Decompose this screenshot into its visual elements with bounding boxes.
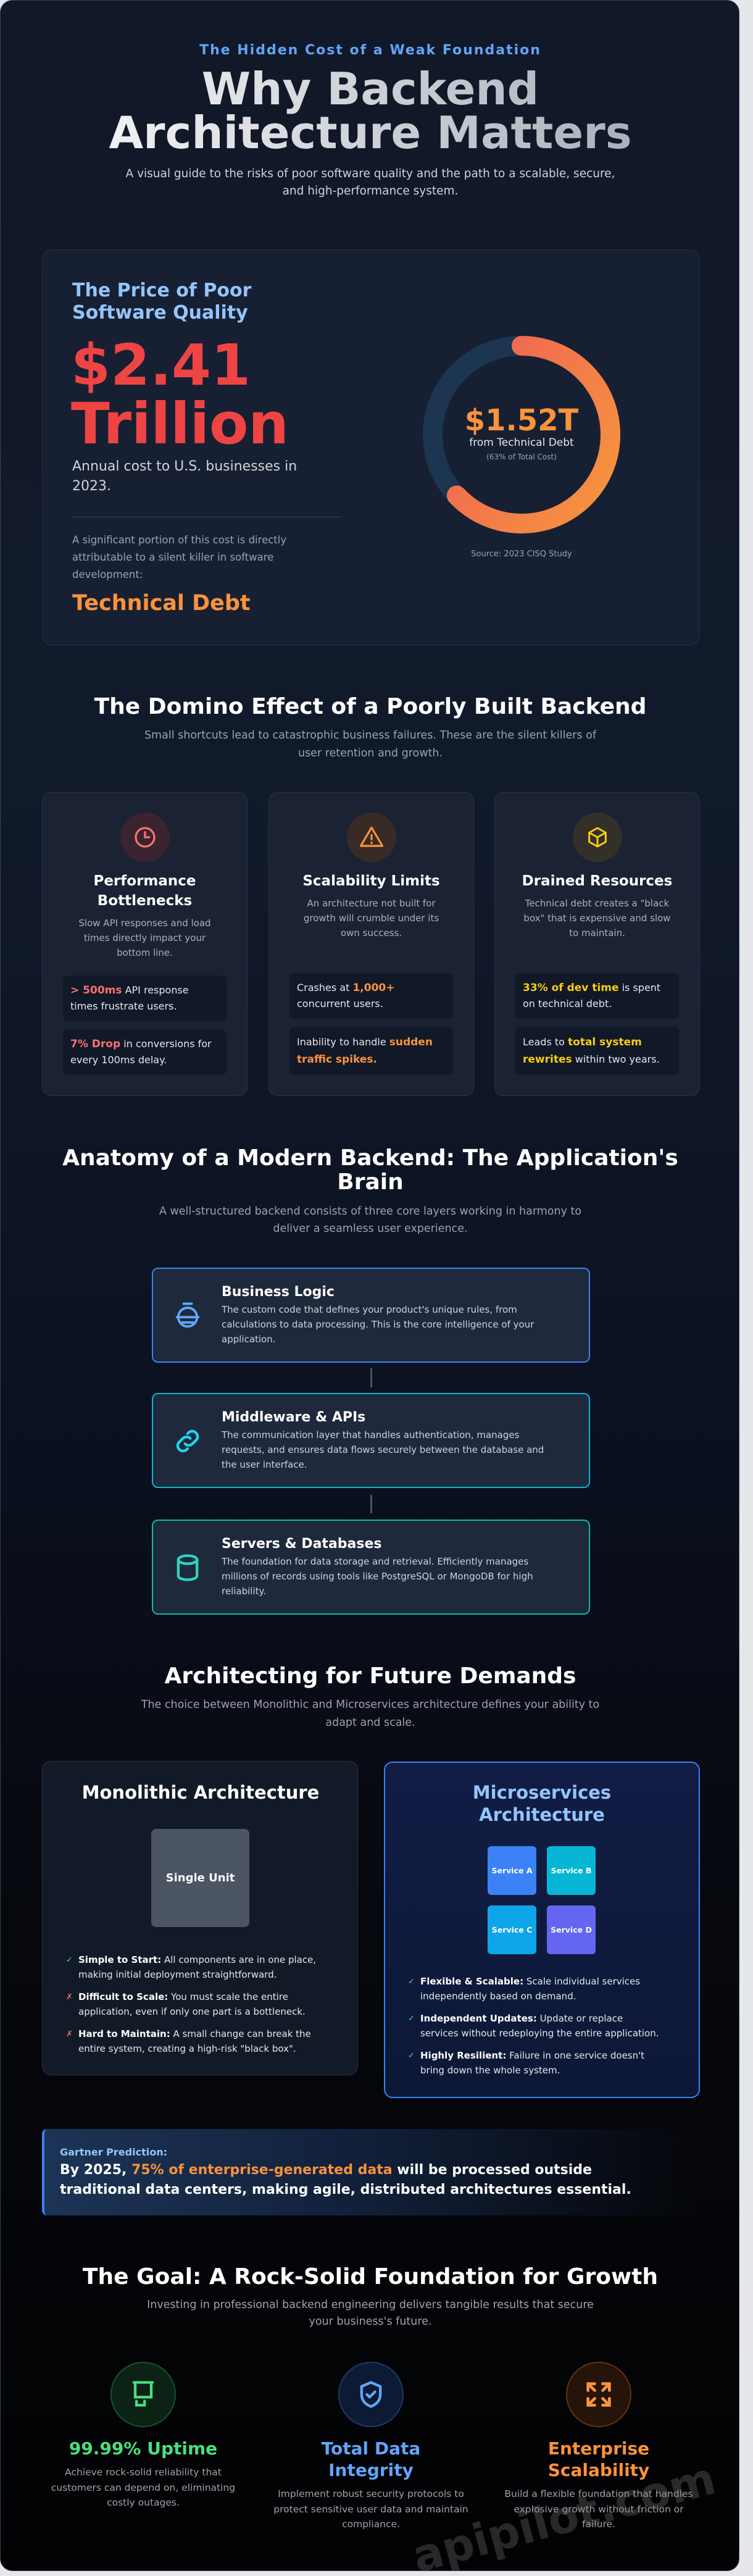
title: Why Backend (202, 63, 539, 115)
result: integrity: Total Data (322, 2438, 420, 2459)
layer: servers: The foundation for data storage and retrieval. Efficiently manages millions of records using tools like PostgreSQL or MongoDB for high reliability. (222, 1556, 533, 1597)
result: scalability (504, 2438, 693, 2530)
stats (289, 973, 453, 1075)
stats: 33% of dev time is spent on technical debt. (523, 982, 660, 1010)
card: performance: Performance Bottlenecks (93, 873, 196, 909)
donut label (465, 403, 578, 461)
heading: Monolithic Architecture (82, 1782, 319, 1803)
stats (515, 973, 679, 1075)
pros/cons list: Difficult to Scale: You must scale the entire application, even if only one part is a bottleneck. (78, 1991, 306, 2017)
stats: Crashes at 1,000+ concurrent users. (297, 982, 395, 1010)
result: scalability: Enterprise (548, 2438, 649, 2459)
stats: Leads to total system rewrites within two years. (523, 1036, 660, 1066)
source: Source: 2023 CISQ Study (471, 550, 572, 559)
layer: servers (152, 1520, 590, 1615)
donut label: from Technical Debt (469, 437, 574, 449)
anatomy subtitle: A well-structured backend consists of three core layers working in harmony to deliver a seamless user experience. (159, 1205, 581, 1235)
callout: gartner: traditional data centers, making agile, distributed architectures essential. (60, 2182, 631, 2198)
pros/cons list: ✗ (66, 2030, 73, 2039)
result: integrity: Integrity (328, 2460, 414, 2480)
icon: expand (566, 2362, 631, 2427)
layer: business logic (152, 1268, 590, 1363)
layer: middleware: Middleware & APIs (222, 1410, 365, 1425)
service blocks: Service A (491, 1866, 532, 1875)
service blocks: Service C (492, 1925, 532, 1934)
card: resources: Technical debt creates a "black box" that is expensive and slow to maintain. (523, 898, 671, 939)
icon: link (177, 1430, 199, 1452)
benefits list: bring down the whole system. (420, 2065, 560, 2076)
architecting heading: Architecting for Future Demands (165, 1663, 576, 1689)
card: performance (42, 792, 248, 1096)
architecting subtitle: The choice between Monolithic and Microservices architecture defines your ability to adapt and scale. (141, 1699, 599, 1729)
big number: Trillion (71, 391, 289, 457)
single unit block (151, 1829, 249, 1927)
card: resources (494, 792, 700, 1096)
result: scalability: Scalability (548, 2460, 649, 2480)
pros/cons list: Simple to Start: All components are in one place, making initial deployment straightforward. (78, 1954, 316, 1980)
eyebrow: The Hidden Cost of a Weak Foundation (199, 43, 541, 58)
card: resources: Drained Resources (522, 873, 672, 889)
stats (63, 976, 227, 1075)
benefits list: independently based on demand. (420, 1991, 576, 2002)
pros/cons list: ✗ (66, 1993, 73, 2002)
intro text: A visual guide to the risks of poor software quality and the path to a scalable, secure, (126, 167, 615, 180)
panel: monolithic (42, 1761, 358, 2075)
big number: $2.41 (71, 332, 251, 398)
layer: business logic: The custom code that defines your product's unique rules, from calculations to data processing. This is the core intelligence of your application. (222, 1304, 534, 1345)
benefits list: ✓ (408, 1977, 415, 1986)
benefits list: Highly Resilient: Failure in one service doesn't (420, 2050, 644, 2061)
pros/cons list: Hard to Maintain: A small change can break the entire system, creating a high-risk "black box". (78, 2028, 311, 2054)
pros/cons list: ✓ (66, 1955, 73, 1965)
service blocks: Service D (551, 1925, 592, 1934)
single unit block: Single Unit (166, 1871, 235, 1884)
anatomy heading: Anatomy of a Modern Backend: The Application's Brain (62, 1145, 678, 1195)
callout: gartner (42, 2129, 700, 2215)
benefits list: Independent Updates: Update or replace (420, 2013, 623, 2024)
result: integrity: Implement robust security protocols to protect sensitive user data and maintain compliance. (273, 2488, 468, 2530)
intro text: and high-performance system. (283, 185, 458, 198)
explanation: A significant portion of this cost is directly attributable to a silent killer in software development: (72, 534, 286, 580)
stats: Inability to handle sudden traffic spikes. (297, 1036, 433, 1066)
heading: The Price of Poor Software Quality (72, 280, 251, 324)
callout: gartner: Gartner Prediction: (60, 2146, 167, 2158)
domino heading: The Domino Effect of a Poorly Built Backend (94, 694, 646, 719)
icon: shield (338, 2362, 404, 2427)
service blocks (488, 1846, 596, 1954)
icon: brain (175, 1303, 200, 1328)
big number (71, 332, 289, 457)
icon: uptime (110, 2362, 176, 2427)
card: scalability: Scalability Limits (302, 873, 440, 889)
pros/cons list (66, 1954, 316, 2054)
icon: clock (120, 813, 170, 862)
panel: microservices (384, 1762, 700, 2098)
result: integrity (273, 2438, 468, 2530)
stats: 7% Drop in conversions for every 100ms delay. (70, 1038, 212, 1066)
intro text (126, 167, 615, 198)
icon: database (177, 1554, 199, 1581)
goal heading: The Goal: A Rock-Solid Foundation for Growth (83, 2264, 658, 2290)
heading: Microservices (473, 1782, 611, 1803)
donut label: (63% of Total Cost) (486, 453, 557, 461)
annual text: Annual cost to U.S. businesses in 2023. (72, 459, 297, 494)
goal subtitle: Investing in professional backend engineering delivers tangible results that secure your business's future. (147, 2299, 594, 2328)
domino subtitle: Small shortcuts lead to catastrophic business failures. These are the silent killers of user retention and growth. (144, 729, 596, 759)
benefits list: ✓ (408, 2051, 415, 2060)
result: uptime: 99.99% Uptime (69, 2438, 217, 2459)
layer: middleware (152, 1393, 590, 1488)
heading: Architecture (479, 1804, 605, 1825)
heading (473, 1782, 611, 1825)
card: scalability: An architecture not built for growth will crumble under its own success. (304, 898, 439, 939)
benefits list: Flexible & Scalable: Scale individual services (420, 1976, 640, 1987)
technical debt label: Technical Debt (72, 591, 251, 616)
benefits list (408, 1976, 659, 2076)
layer: middleware: The communication layer that handles authentication, manages requests, and ensures data flows securely between the database and the user interface. (222, 1429, 544, 1470)
service blocks: Service B (551, 1866, 591, 1875)
panel: price of poor quality (42, 249, 700, 645)
callout: gartner: By 2025, 75% of enterprise-generated data will be processed outside (60, 2162, 592, 2178)
card: scalability (268, 792, 474, 1096)
card: performance: Slow API responses and load times directly impact your bottom line. (78, 918, 211, 958)
icon: cube (573, 813, 622, 862)
benefits list: services without redeploying the entire application. (420, 2028, 659, 2039)
donut label: $1.52T (465, 403, 578, 438)
benefits list: ✓ (408, 2014, 415, 2023)
title (1, 67, 740, 155)
layer: business logic: Business Logic (222, 1284, 335, 1300)
result: scalability: Build a flexible foundation that handles explosive growth without friction or failure. (504, 2488, 693, 2530)
icon: warning (347, 813, 396, 862)
layer: servers: Servers & Databases (222, 1536, 381, 1552)
donut chart (423, 336, 620, 533)
title: Architecture Matters (109, 107, 632, 159)
stats: > 500ms API response times frustrate users. (70, 984, 189, 1012)
result: uptime: Achieve rock-solid reliability that customers can depend on, eliminating costly outages. (51, 2467, 235, 2508)
result: uptime (51, 2438, 235, 2508)
